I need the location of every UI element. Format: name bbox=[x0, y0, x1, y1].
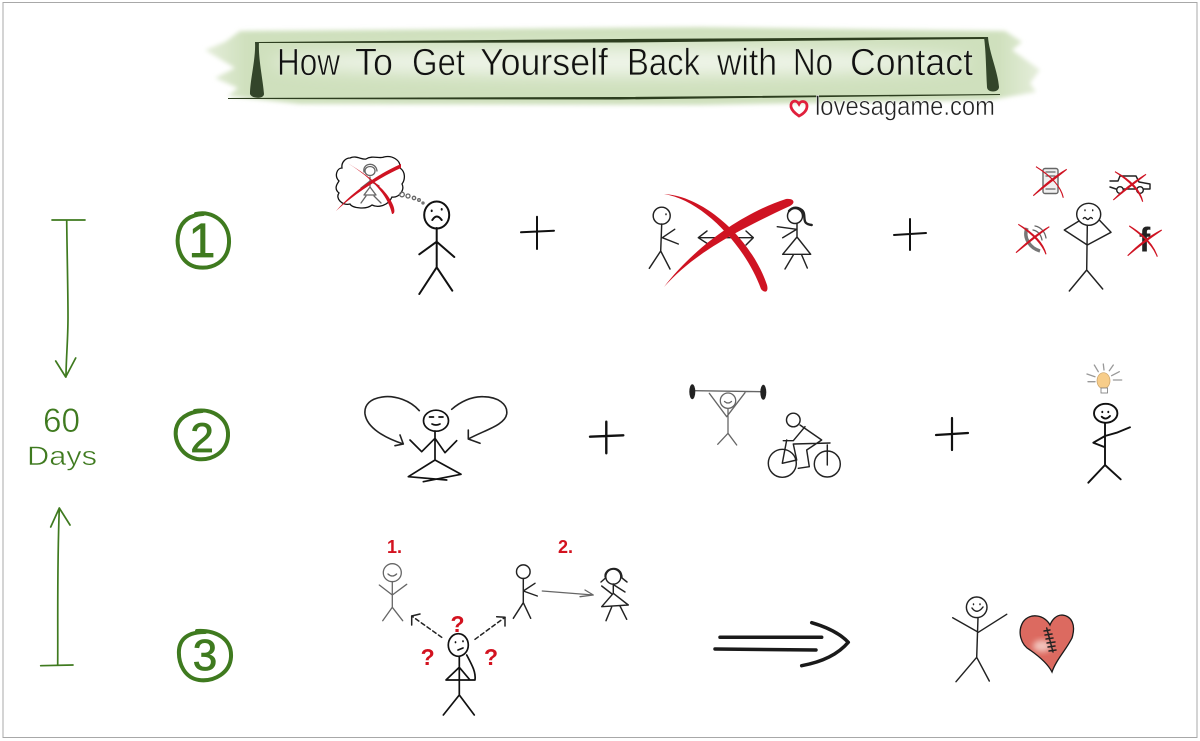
brand logo bbox=[791, 91, 995, 121]
happy stick man bbox=[953, 597, 1007, 682]
60 days timeline bbox=[27, 220, 97, 666]
step 2 badge bbox=[176, 410, 228, 461]
banner bottom stroke bbox=[228, 94, 1000, 100]
step 1 badge: 1 bbox=[189, 215, 215, 268]
icon: car crossed bbox=[1110, 172, 1150, 202]
step 2: exercise bbox=[689, 384, 840, 477]
top arrow bbox=[52, 220, 85, 377]
plus sign bbox=[936, 418, 968, 450]
step 1: sad man thinking of crossed out ex bbox=[336, 157, 454, 294]
thinking stick man bbox=[443, 634, 475, 715]
icon: facebook crossed bbox=[1128, 222, 1162, 260]
big red cross bbox=[664, 194, 793, 292]
woman in thought bbox=[361, 164, 381, 203]
woman bbox=[777, 208, 812, 269]
step 2 badge: 2 bbox=[190, 414, 214, 461]
title text: with bbox=[716, 42, 777, 84]
worried stick man bbox=[1064, 203, 1111, 291]
label 2: 2. bbox=[558, 537, 573, 557]
meditating figure bbox=[408, 410, 461, 482]
title text: To bbox=[355, 42, 393, 84]
title text: Contact bbox=[850, 42, 973, 84]
red cross bbox=[336, 158, 401, 214]
icon: heart logo bbox=[791, 101, 807, 116]
brand name: lovesagame.com bbox=[815, 91, 995, 121]
cyclist bbox=[768, 413, 840, 477]
question marks: ? bbox=[421, 644, 435, 670]
60 days label: 60 bbox=[43, 402, 80, 440]
sad woman bbox=[601, 569, 628, 621]
dashed arrows bbox=[412, 614, 505, 639]
plus sign bbox=[894, 219, 926, 250]
step 3 badge: 3 bbox=[193, 631, 217, 680]
weightlifter bbox=[689, 384, 766, 445]
title text: Back bbox=[627, 42, 701, 84]
step 3: happy man with mended heart bbox=[953, 597, 1074, 682]
step 3 badge bbox=[179, 631, 231, 680]
step 2: meditating man with returning arrows bbox=[365, 397, 507, 482]
banner right bar bbox=[984, 37, 999, 92]
icon: telephone handset crossed bbox=[1016, 224, 1049, 254]
icon: stitched heart bbox=[1020, 615, 1074, 672]
plus sign bbox=[590, 422, 623, 453]
title text: Get bbox=[412, 42, 465, 84]
title text: How bbox=[277, 42, 340, 84]
sad stick man bbox=[419, 202, 454, 294]
arrow to woman bbox=[542, 590, 593, 597]
bottom arrow bbox=[41, 508, 73, 666]
curved arrows bbox=[365, 397, 507, 446]
60 days label: Days bbox=[27, 441, 97, 471]
happy man option bbox=[379, 564, 407, 621]
icon: facebook crossed: f bbox=[1139, 222, 1151, 260]
icon: phone crossed bbox=[1033, 167, 1067, 198]
two-way arrow bbox=[698, 231, 753, 245]
thought bubbles bbox=[400, 192, 424, 204]
question marks bbox=[421, 611, 498, 670]
man bbox=[649, 207, 678, 269]
step 2: man with idea bbox=[1087, 364, 1130, 483]
60 days label bbox=[27, 402, 97, 471]
question marks: ? bbox=[484, 644, 498, 670]
banner left bar bbox=[250, 42, 264, 98]
pointing stick man bbox=[1088, 404, 1130, 483]
thought cloud bbox=[336, 157, 404, 208]
big double arrow bbox=[715, 623, 848, 666]
title text bbox=[277, 42, 973, 84]
title text: Yourself bbox=[480, 42, 608, 84]
banner top stroke bbox=[258, 37, 985, 43]
step 3: choice between moving on or returning bbox=[379, 537, 628, 715]
step 1: no contact with ex bbox=[649, 194, 812, 292]
step 1 badge bbox=[178, 213, 229, 268]
plus sign bbox=[521, 217, 554, 249]
label 1: 1. bbox=[387, 537, 402, 557]
man walking to ex bbox=[513, 565, 537, 618]
title text: No bbox=[793, 42, 833, 84]
question marks: ? bbox=[450, 611, 465, 637]
title banner bbox=[205, 27, 1040, 105]
icon: light bulb bbox=[1087, 364, 1122, 393]
step 1: no phone, car, calls, facebook bbox=[1016, 167, 1162, 291]
